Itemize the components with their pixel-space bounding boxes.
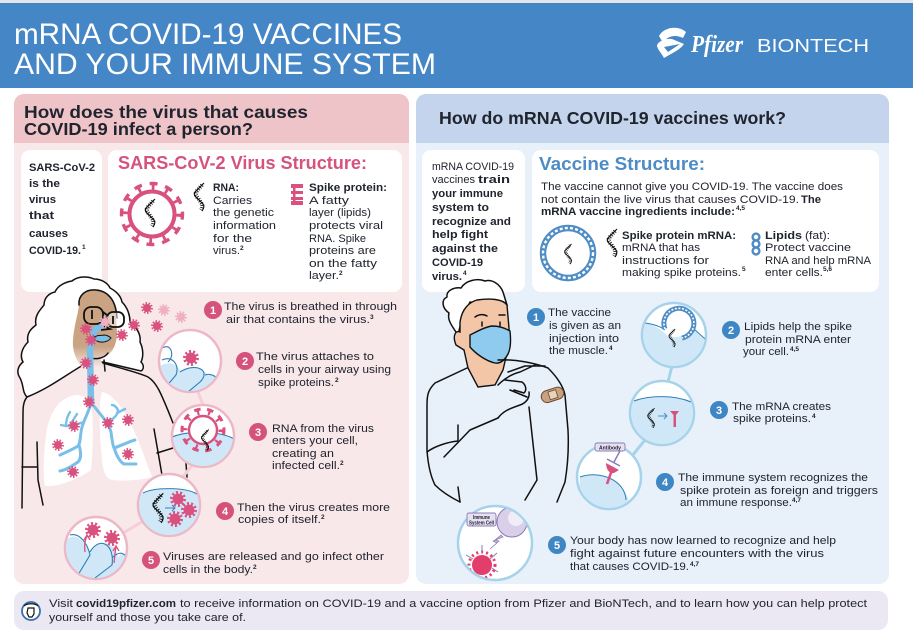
step 3: RNA enters: 2	[340, 460, 344, 467]
Pfizer logo	[657, 28, 744, 58]
vaccine step 1: is given as an	[549, 320, 621, 332]
card: SARS-CoV-2 intro: causes	[29, 228, 68, 240]
footer text: to receive information on COVID-19 and a vaccine option from Pfizer and BioNTech, and to learn how you can help protect	[180, 598, 868, 610]
card: vaccine intro: vaccines	[432, 174, 475, 186]
vaccine step 4: 4	[662, 477, 669, 489]
step 3: RNA enters: infected cell.	[272, 460, 340, 472]
RNA description: Carries	[213, 195, 252, 207]
vaccine step 1: The vaccine	[548, 307, 611, 319]
lips	[93, 335, 111, 342]
step 5: released: Viruses are released and go infect other	[163, 551, 384, 563]
step 5: released: 2	[253, 564, 257, 571]
step 5: released: 5	[148, 555, 154, 567]
lipids description: Protect vaccine	[765, 242, 851, 254]
left panel heading: How does the virus that causes	[24, 102, 308, 122]
lipids description: 5,6	[823, 266, 832, 273]
vaccine explanation: The	[801, 194, 821, 206]
card: virus structure	[108, 150, 402, 292]
left panel heading	[24, 102, 308, 139]
icon: website pointer	[22, 602, 40, 620]
RNA description: information	[213, 220, 276, 232]
step 4: copies: copies of itself.	[238, 514, 321, 526]
vaccine step 1	[527, 307, 621, 357]
bubble: mRNA creates spike proteins	[630, 381, 695, 450]
spike protein mRNA description	[622, 230, 746, 279]
card: vaccine intro: your immune	[432, 188, 503, 200]
immune system cell label	[467, 513, 496, 526]
spike protein mRNA description: making spike proteins.	[622, 267, 741, 279]
face	[73, 290, 117, 368]
icon: spike proteins	[291, 184, 303, 205]
inhaled virus particles	[53, 303, 186, 477]
airway	[60, 324, 136, 471]
step 1: breathed in: air that contains the virus.	[226, 314, 370, 326]
icon: lipid nanoparticle	[543, 228, 593, 278]
lipids description: (fat):	[805, 230, 830, 242]
lipids description	[765, 230, 872, 279]
step 1: breathed in: 3	[370, 314, 374, 321]
lungs	[44, 392, 152, 486]
vaccine step 1: 1	[533, 312, 539, 324]
vaccine structure heading: Vaccine Structure:	[539, 153, 705, 174]
antibody label: Antibody	[599, 445, 622, 451]
lipids description: Lipids	[765, 230, 802, 242]
vaccine step 4: 4,7	[792, 497, 801, 504]
vaccine explanation: 4,5	[736, 205, 745, 212]
vaccine step 5: 5	[554, 540, 560, 552]
card: vaccine intro: help fight	[432, 229, 488, 241]
step 4: copies	[216, 502, 390, 526]
footer text: Visit	[49, 598, 74, 610]
vaccine step 5: fight against future encounters with the virus	[570, 548, 824, 560]
step 1: breathed in: The virus is breathed in through	[224, 301, 397, 313]
card: vaccine intro: against the	[432, 243, 498, 255]
lipids description: enter cells.	[765, 267, 823, 279]
main title	[14, 18, 436, 81]
illustration: person with lungs	[18, 277, 187, 508]
vaccine step 3: 3	[716, 405, 722, 417]
card: vaccine intro: virus.	[432, 271, 462, 283]
bubble: viruses released	[64, 516, 128, 580]
main title: AND YOUR IMMUNE SYSTEM	[14, 48, 436, 81]
spike protein description: proteins are	[309, 245, 376, 257]
spike protein description: Spike protein:	[309, 182, 387, 194]
left panel heading: COVID-19 infect a person?	[24, 119, 253, 139]
vaccine step 3: spike proteins.	[733, 413, 811, 425]
spike protein description: 2	[339, 270, 343, 277]
right panel heading: How do mRNA COVID-19 vaccines work?	[439, 108, 786, 128]
body outline	[22, 360, 187, 508]
vaccine step 5: that causes COVID-19.	[570, 561, 689, 573]
card: SARS-CoV-2 intro: 1	[82, 244, 86, 251]
card: vaccine intro: 4	[463, 270, 467, 277]
card: SARS-CoV-2 intro: is the	[29, 178, 60, 190]
Pfizer logo: Pfizer	[690, 32, 744, 58]
bubble: immune system cell	[458, 506, 532, 580]
vaccine step 3: The mRNA creates	[732, 401, 831, 413]
glasses	[84, 307, 124, 330]
hair	[443, 280, 507, 335]
spike protein mRNA description: 5	[742, 266, 746, 273]
card: SARS-CoV-2 intro: SARS-CoV-2	[29, 162, 95, 174]
face mask	[470, 326, 511, 363]
vaccine explanation: not contain the live virus that causes COVID-19.	[541, 194, 799, 206]
step 3: RNA enters: enters your cell,	[272, 435, 358, 447]
RNA description: for the	[213, 233, 252, 245]
band-aid	[540, 386, 565, 404]
card: vaccine intro: recognize and	[432, 216, 511, 228]
step 3: RNA enters: RNA from the virus	[272, 423, 374, 435]
spike protein description: RNA. Spike	[309, 233, 366, 245]
step 1: breathed in: 1	[210, 305, 216, 317]
vaccine explanation: mRNA vaccine ingredients include:	[541, 206, 735, 218]
RNA description: virus.	[213, 245, 240, 257]
step 2: attaches: spike proteins.	[258, 377, 334, 389]
vaccine step 4: an immune response.	[680, 497, 792, 509]
header banner	[0, 0, 913, 88]
RNA description: 2	[240, 245, 244, 252]
hair	[18, 277, 143, 397]
connectors between blue bubbles	[632, 366, 672, 456]
vaccine explanation	[541, 181, 843, 218]
step 2: attaches	[236, 351, 391, 389]
card: SARS-CoV-2 intro: that	[29, 210, 54, 222]
card: vaccine intro: train	[478, 174, 510, 186]
immune system cell label: Immune	[473, 515, 490, 521]
spike protein description	[309, 182, 387, 282]
step 2: attaches: The virus attaches to	[256, 351, 374, 363]
connectors between pink bubbles	[120, 392, 205, 535]
step 5: released: cells in the body.	[163, 564, 253, 576]
spike protein description: layer (lipids)	[309, 207, 371, 219]
card: vaccine intro	[422, 150, 525, 292]
bubble: RNA enters cell	[170, 405, 236, 470]
BioNTech logo: BIONTECH	[757, 36, 869, 56]
step 4: copies: 2	[321, 514, 325, 521]
card: SARS-CoV-2 intro	[21, 150, 102, 292]
footer text: yourself and those you take care of.	[49, 612, 246, 624]
spike protein description: protects viral	[309, 220, 383, 232]
icon: mRNA strand	[607, 229, 617, 257]
immune system cell label: System Cell	[469, 520, 494, 526]
vaccine step 5: 4,7	[690, 561, 699, 568]
vaccine step 2: protein mRNA enter	[745, 334, 851, 346]
face details	[475, 315, 505, 326]
step 5: released	[142, 551, 384, 576]
vaccine step 2: your cell.	[743, 346, 789, 358]
vaccine step 1: 4	[609, 345, 613, 352]
panel: how vaccines work	[416, 94, 889, 584]
step 2: attaches: 2	[242, 356, 248, 368]
vaccine step 2: 2	[728, 325, 734, 337]
vaccine step 5: Your body has now learned to recognize and help	[570, 535, 836, 547]
vaccine step 2	[722, 321, 852, 358]
vaccine step 4	[656, 472, 878, 509]
footer text	[49, 598, 868, 624]
step 2: attaches: cells in your airway using	[258, 364, 391, 376]
vaccine step 1: injection into	[549, 333, 619, 345]
spike protein description: layer.	[309, 270, 339, 282]
RNA description: the genetic	[213, 207, 274, 219]
bubble: lipids enter cell	[640, 303, 708, 370]
step 1: breathed in	[204, 301, 397, 326]
vaccine step 3	[710, 401, 831, 425]
RNA description: RNA:	[213, 182, 239, 194]
hand on shoulder	[498, 365, 545, 418]
vaccine step 2: Lipids help the spike	[744, 321, 852, 333]
illustration: vaccinated person	[427, 280, 568, 502]
shirt and arms	[427, 360, 568, 502]
card: vaccine structure	[532, 150, 879, 292]
vaccine step 3: 4	[812, 413, 816, 420]
bubble: virus attaches to airway	[158, 328, 222, 394]
icon: lipids	[753, 234, 759, 254]
panel: how the virus infects	[14, 94, 409, 584]
lipids description: RNA and help mRNA	[765, 255, 872, 267]
vaccine explanation: The vaccine cannot give you COVID-19. The vaccine does	[541, 181, 843, 193]
bubble: antibody recognizes spike protein	[577, 443, 641, 512]
step 4: copies: 4	[222, 506, 229, 518]
virus structure heading: SARS-CoV-2 Virus Structure:	[118, 152, 367, 173]
face and neck	[454, 299, 510, 387]
card: vaccine intro: mRNA COVID-19	[432, 161, 514, 173]
footer call to action	[14, 591, 888, 630]
step 3: RNA enters: creating an	[272, 448, 334, 460]
card: vaccine intro: system to	[432, 202, 489, 214]
card: SARS-CoV-2 intro: virus	[29, 194, 56, 206]
main title: mRNA COVID-19 VACCINES	[14, 18, 402, 51]
icon: RNA strand	[194, 183, 204, 211]
vaccine step 2: 4,5	[790, 346, 799, 353]
step 3: RNA enters: 3	[255, 427, 261, 439]
spike protein description: A fatty	[309, 195, 350, 207]
footer text: covid19pfizer.com	[76, 598, 176, 610]
spike protein mRNA description: Spike protein mRNA:	[622, 230, 736, 242]
vaccine step 4: spike protein as foreign and triggers	[680, 485, 878, 497]
vaccine step 1: the muscle.	[549, 345, 608, 357]
spike protein description: on the fatty	[309, 258, 377, 270]
spike protein mRNA description: mRNA that has	[622, 242, 700, 254]
RNA description	[213, 182, 276, 257]
card: vaccine intro: COVID-19	[432, 257, 483, 269]
bubble: virus replicates	[138, 474, 200, 540]
card: SARS-CoV-2 intro: COVID-19.	[29, 245, 81, 257]
spike protein mRNA description: instructions for	[622, 255, 709, 267]
icon: virus with RNA	[122, 184, 182, 244]
step 3: RNA enters	[249, 423, 374, 472]
vaccine step 5	[548, 535, 836, 573]
vaccine step 4: The immune system recognizes the	[678, 472, 868, 484]
step 2: attaches: 2	[335, 377, 339, 384]
step 4: copies: Then the virus creates more	[237, 502, 390, 514]
